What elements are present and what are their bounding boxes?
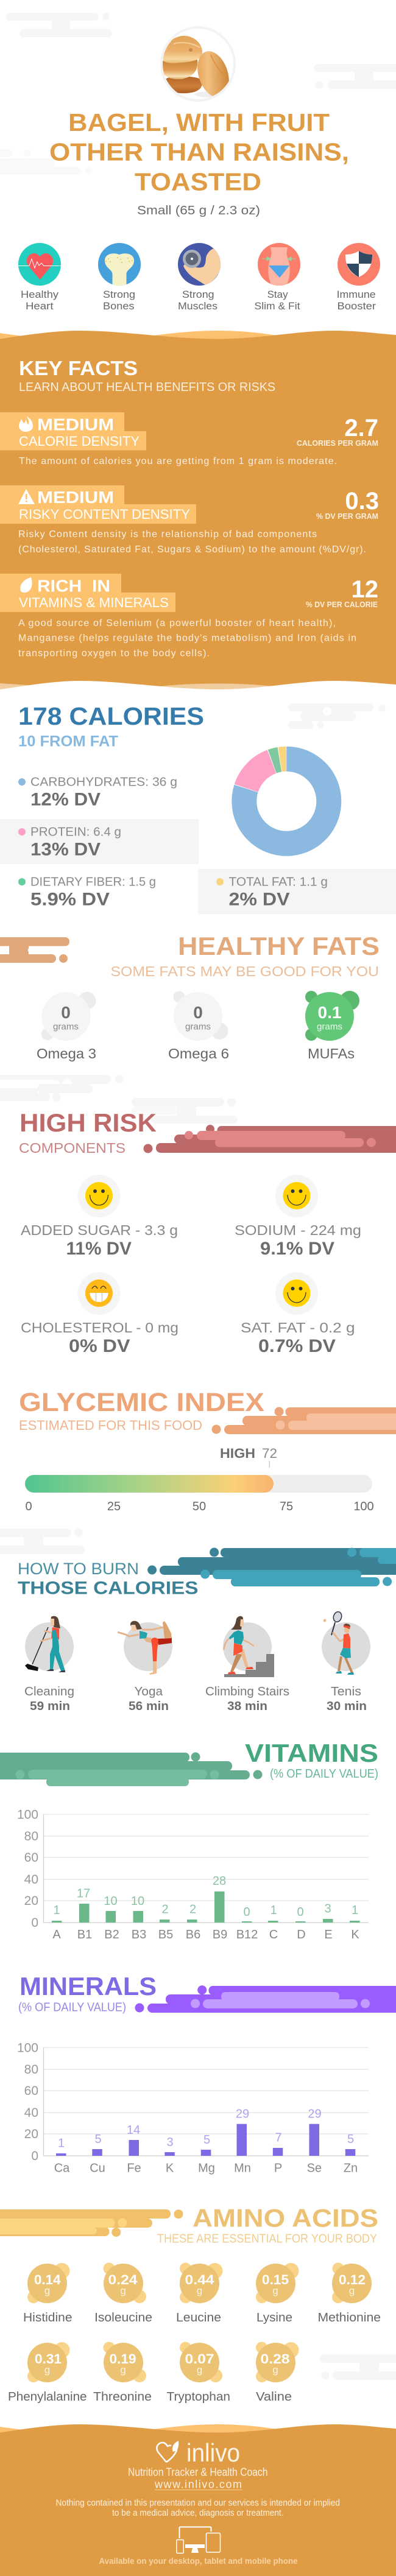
heading [18, 702, 204, 750]
icon: healthy heart: Healthy [21, 289, 59, 300]
heading: 10 FROM FAT [18, 733, 118, 750]
phenylalanine [8, 2342, 87, 2404]
fact: calorie density: 2.7 [344, 415, 378, 442]
bar chart: minerals: Se [307, 2162, 322, 2175]
activity: tennis: Tenis [331, 1685, 361, 1698]
lysine [256, 2263, 299, 2324]
legend: protein: PROTEIN: 6.4 g [30, 826, 121, 839]
background cloud near calories [288, 703, 385, 729]
bar chart: vitamins: 20 [24, 1894, 38, 1908]
disclaimer [56, 2498, 340, 2518]
logo: inlivo [186, 2438, 240, 2467]
icon: stay slim and fit [255, 243, 300, 312]
heading: HIGH RISK [19, 1108, 157, 1137]
leucine [176, 2263, 223, 2324]
threonine: g [120, 2364, 126, 2376]
fact: rich in vitamins and minerals: Manganese (helps regulate the body's metabolism) and Iron (aids in [18, 633, 356, 643]
icon: healthy heart [18, 243, 61, 312]
item: cholesterol: CHOLESTEROL - 0 mg [21, 1320, 179, 1336]
valine: Valine [256, 2390, 292, 2404]
item: cholesterol [21, 1272, 179, 1356]
bar chart: vitamins: 1 [352, 1904, 358, 1917]
fact: rich in vitamins and minerals: % DV PER CALORIE [306, 600, 378, 609]
bar chart: vitamins: 1 [53, 1904, 60, 1917]
header decoration [135, 1985, 396, 2013]
isoleucine [94, 2263, 152, 2324]
bar chart: vitamins: 0 [31, 1916, 38, 1930]
leucine: Leucine [176, 2311, 221, 2324]
heading: GLYCEMIC INDEX [19, 1388, 264, 1417]
legend: dietary fiber [18, 876, 156, 910]
bar chart: minerals [17, 2041, 369, 2175]
panel: amino acids: THESE ARE ESSENTIAL FOR YOUR BODY [157, 2233, 377, 2246]
bar chart: vitamins [17, 1807, 369, 1941]
icon: stay slim and fit: Stay [267, 289, 288, 300]
omega 3 [37, 991, 96, 1061]
panel: key facts [0, 331, 396, 694]
icon: strong muscles: Muscles [178, 300, 217, 312]
activity: climbing stairs: Climbing Stairs [205, 1685, 289, 1698]
panel: footer [0, 2424, 396, 2576]
title: OTHER THAN RAISINS, [49, 138, 349, 166]
bar chart: minerals: Zn [344, 2162, 358, 2175]
omega 6: 0 [193, 1003, 203, 1022]
image: bagels in a circle [161, 27, 235, 102]
heading: 178 CALORIES [18, 702, 204, 730]
legend: dietary fiber: DIETARY FIBER: 1.5 g [30, 876, 156, 889]
bar chart: minerals: 5 [94, 2133, 102, 2146]
gauge value: 72 [262, 1446, 277, 1461]
isoleucine: 0.24 [108, 2272, 138, 2287]
heading [19, 357, 275, 394]
fact: rich in vitamins and minerals: A good source of Selenium (a powerful booster of heart health), [18, 618, 336, 628]
header decoration [0, 1753, 262, 1786]
item: saturated fat: 0.7% DV [258, 1336, 336, 1356]
bar chart: minerals: Mg [198, 2162, 215, 2175]
activity: tennis: 30 min [327, 1700, 367, 1713]
icon: strong bones: Strong [103, 289, 135, 300]
header decoration [212, 1407, 396, 1434]
panel: healthy fats [0, 932, 380, 1061]
bar chart: vitamins: B1 [77, 1928, 92, 1941]
lysine: g [272, 2285, 278, 2296]
bar chart: vitamins: 10 [104, 1895, 118, 1908]
item: sodium [235, 1175, 361, 1259]
gauge ticks: 100 [353, 1500, 374, 1513]
phenylalanine: 0.31 [35, 2351, 62, 2367]
omega 6: Omega 6 [168, 1046, 229, 1061]
item: saturated fat [241, 1272, 355, 1356]
icon: immune booster: Immune [337, 289, 376, 300]
legend: protein: 13% DV [30, 839, 101, 860]
tagline: Nutrition Tracker & Health Coach [128, 2466, 268, 2479]
bar chart: minerals: 14 [127, 2124, 140, 2137]
bar chart: vitamins: D [297, 1928, 306, 1941]
threonine: 0.19 [110, 2351, 136, 2367]
methionine [318, 2263, 381, 2324]
bar chart: vitamins: B2 [104, 1928, 119, 1941]
panel: vitamins: (% OF DAILY VALUE) [270, 1767, 378, 1781]
heading: LEARN ABOUT HEALTH BENEFITS OR RISKS [19, 381, 275, 394]
legend: total fat: 2% DV [229, 889, 290, 910]
panel: how to burn those calories [18, 1548, 396, 1713]
bar chart: minerals: Ca [54, 2162, 70, 2175]
fact: risky content density: 0.3 [345, 488, 379, 515]
bar chart: minerals: 80 [24, 2063, 38, 2077]
bar chart: vitamins: C [269, 1928, 278, 1941]
heading: HOW TO BURN [18, 1560, 139, 1578]
bar chart: vitamins: B9 [213, 1928, 227, 1941]
gauge ticks: 50 [193, 1500, 206, 1513]
bar chart: minerals: Fe [127, 2162, 141, 2175]
disclaimer: Nothing contained in this presentation and our services is intended or implied [56, 2498, 340, 2508]
icon: strong muscles [178, 243, 221, 312]
lysine: 0.15 [262, 2272, 289, 2287]
bar chart: vitamins: E [324, 1928, 333, 1941]
panel: amino acids [0, 2203, 381, 2404]
histidine [23, 2263, 72, 2324]
activity: climbing stairs [205, 1616, 289, 1713]
heading: VITAMINS [245, 1739, 378, 1767]
bar chart: vitamins: 10 [131, 1895, 144, 1908]
background cloud before burn [0, 1529, 85, 1554]
heading: AMINO ACIDS [193, 2203, 378, 2233]
panel: high risk components: COMPONENTS [19, 1140, 126, 1156]
panel: high risk components [19, 1108, 396, 1356]
panel: glycemic index: ESTIMATED FOR THIS FOOD [19, 1418, 202, 1433]
bar chart: minerals: P [274, 2162, 282, 2175]
header decoration [0, 2209, 183, 2237]
fact: calorie density: MEDIUM [37, 415, 114, 434]
bar chart: vitamins: 17 [77, 1887, 90, 1900]
gauge value: HIGH [220, 1446, 255, 1461]
fact: calorie density: CALORIES PER GRAM [297, 439, 378, 448]
bar chart: vitamins: 0 [243, 1906, 250, 1919]
icon: strong bones [98, 243, 141, 312]
leucine: 0.44 [185, 2272, 214, 2287]
gauge bar [25, 1475, 372, 1493]
panel: vitamins [0, 1739, 378, 1941]
title: TOASTED [135, 168, 261, 196]
fact: rich in vitamins and minerals: VITAMINS & MINERALS [19, 595, 169, 610]
background clouds top [0, 13, 396, 175]
item: added sugar: ADDED SUGAR - 3.3 g [21, 1222, 178, 1238]
bar chart: minerals: 1 [58, 2136, 65, 2150]
activity: cleaning: Cleaning [24, 1685, 74, 1698]
mufas: 0.1 [318, 1003, 341, 1022]
bar chart: vitamins: A [52, 1928, 61, 1941]
mufas [305, 991, 359, 1061]
fact: risky content density: RISKY CONTENT DENSITY [19, 507, 190, 522]
bar chart: minerals: 40 [24, 2106, 38, 2120]
item: added sugar [21, 1175, 178, 1259]
omega 6 [168, 991, 229, 1061]
valine: 0.28 [261, 2351, 290, 2367]
bar chart: minerals: 5 [347, 2133, 354, 2146]
legend: total fat: TOTAL FAT: 1.1 g [229, 876, 328, 889]
fact: risky content density [0, 485, 379, 555]
fact: calorie density: CALORIE DENSITY [19, 434, 140, 449]
mufas: MUFAs [308, 1046, 355, 1061]
gauge value [220, 1446, 277, 1468]
phenylalanine: Phenylalanine [8, 2390, 87, 2404]
panel: healthy fats: SOME FATS MAY BE GOOD FOR YOU [111, 963, 379, 979]
threonine [93, 2342, 152, 2404]
lysine: Lysine [256, 2311, 292, 2324]
fact: rich in vitamins and minerals: 12 [351, 576, 378, 603]
tryptophan [167, 2342, 230, 2404]
activity: climbing stairs: 38 min [227, 1700, 267, 1713]
activity: yoga: 56 min [129, 1700, 169, 1713]
background cloud near amino acids [319, 2354, 396, 2380]
header decoration [144, 1125, 396, 1153]
bar chart: vitamins: K [351, 1928, 359, 1941]
omega 3: 0 [61, 1003, 71, 1022]
title: BAGEL, WITH FRUIT [68, 108, 330, 136]
fact: risky content density: MEDIUM [37, 488, 114, 507]
valine [256, 2342, 299, 2404]
mufas: grams [317, 1022, 342, 1032]
disclaimer: to be a medical advice, diagnosis or treatment. [112, 2508, 284, 2518]
bar chart: vitamins: 40 [24, 1873, 38, 1887]
bar chart: vitamins: B5 [158, 1928, 173, 1941]
threonine: Threonine [93, 2390, 152, 2404]
legend: carbohydrates: CARBOHYDRATES: 36 g [30, 776, 177, 789]
item: cholesterol: 0% DV [69, 1336, 130, 1356]
bar chart: vitamins: B3 [132, 1928, 146, 1941]
isoleucine: Isoleucine [94, 2311, 152, 2324]
tryptophan: 0.07 [185, 2351, 214, 2367]
heading: MINERALS [19, 1972, 157, 2001]
donut chart [244, 759, 329, 843]
legend: total fat [198, 869, 396, 914]
valine: g [272, 2364, 278, 2376]
legend: carbohydrates: 12% DV [30, 789, 101, 810]
histidine: Histidine [23, 2311, 72, 2324]
activity: yoga: Yoga [134, 1685, 163, 1698]
fact: risky content density: Risky Content density is the relationship of bad components [18, 529, 317, 540]
methionine: 0.12 [339, 2272, 366, 2287]
icon: stay slim and fit: Slim & Fit [255, 300, 300, 312]
item: sodium: 9.1% DV [260, 1239, 334, 1259]
omega 3: Omega 3 [37, 1046, 96, 1061]
bar chart: minerals: 3 [166, 2136, 174, 2149]
bar chart: minerals: 0 [31, 2149, 38, 2163]
legend: protein [0, 819, 199, 864]
phenylalanine: g [44, 2364, 50, 2376]
panel: minerals: (% OF DAILY VALUE) [18, 2001, 126, 2015]
methionine: g [349, 2285, 355, 2296]
fact: rich in vitamins and minerals [0, 574, 378, 659]
heading: HEALTHY FATS [178, 932, 380, 960]
bar chart: vitamins: 80 [24, 1829, 38, 1843]
fact: calorie density [0, 412, 378, 466]
item: sodium: SODIUM - 224 mg [235, 1222, 361, 1238]
bar chart: vitamins: 1 [270, 1904, 277, 1917]
item: saturated fat: SAT. FAT - 0.2 g [241, 1320, 355, 1336]
fact: rich in vitamins and minerals: transporting oxygen to the body cells). [18, 648, 210, 659]
logo [157, 2438, 240, 2467]
bar chart: vitamins: 2 [189, 1902, 196, 1916]
title [49, 108, 349, 196]
panel: calories [0, 702, 396, 914]
bar chart: minerals: 29 [308, 2107, 322, 2120]
serving size: Small (65 g / 2.3 oz) [137, 204, 260, 217]
bar chart: vitamins: 2 [161, 1902, 169, 1916]
icon: healthy heart: Heart [26, 300, 54, 312]
legend: dietary fiber: 5.9% DV [30, 889, 110, 910]
item: added sugar: 11% DV [66, 1239, 132, 1259]
panel: how to burn those calories: THOSE CALORIES [18, 1578, 199, 1598]
legend: carbohydrates [18, 776, 177, 810]
benefit icons row [18, 243, 380, 312]
panel: minerals [17, 1972, 396, 2175]
bar chart: minerals: 29 [236, 2107, 249, 2120]
panel: glycemic index [19, 1388, 396, 1513]
fact: risky content density: % DV PER GRAM [316, 512, 378, 521]
isoleucine: g [120, 2285, 126, 2296]
heading: KEY FACTS [19, 357, 138, 379]
availability note: Available on your desktop, tablet and mobile phone [99, 2556, 298, 2566]
bar chart: vitamins: 60 [24, 1851, 38, 1865]
bar chart: minerals: Mn [234, 2162, 251, 2175]
gauge ticks [25, 1500, 374, 1513]
website: www.inlivo.com [154, 2479, 242, 2491]
header decoration [0, 937, 69, 963]
omega 3: grams [53, 1022, 79, 1032]
icon: immune booster: Booster [338, 300, 376, 312]
bar chart: vitamins: B6 [186, 1928, 200, 1941]
icon: immune booster [337, 243, 380, 312]
header decoration [147, 1548, 396, 1586]
bar chart: minerals: K [166, 2162, 174, 2175]
bar chart: vitamins: 28 [213, 1874, 226, 1888]
histidine: 0.14 [34, 2272, 61, 2287]
bar chart: minerals: 7 [275, 2131, 282, 2145]
bar chart: minerals: 60 [24, 2084, 38, 2098]
gauge ticks: 75 [280, 1500, 293, 1513]
omega 6: grams [185, 1022, 211, 1032]
bar chart: vitamins: B12 [236, 1928, 258, 1941]
bar chart: vitamins: 0 [297, 1906, 304, 1919]
fact: risky content density: (Cholesterol, Saturated Fat, Sugars & Sodium) to the amount (%DV/gr). [18, 544, 366, 555]
background clouds before high risk [0, 1075, 238, 1124]
activity: tennis [322, 1611, 370, 1713]
icon: devices [177, 2527, 221, 2553]
gauge ticks: 0 [25, 1500, 32, 1513]
bar chart: vitamins: 3 [324, 1902, 331, 1916]
icon: strong bones: Bones [103, 300, 134, 312]
activity: cleaning: 59 min [30, 1700, 70, 1713]
leucine: g [197, 2285, 202, 2296]
tryptophan: Tryptophan [167, 2390, 230, 2404]
activity: cleaning [24, 1616, 74, 1713]
fact: calorie density: The amount of calories you are getting from 1 gram is moderate. [19, 456, 337, 466]
tryptophan: g [197, 2364, 202, 2376]
activity: yoga [118, 1621, 172, 1713]
bar chart: vitamins: 100 [17, 1807, 38, 1822]
gauge ticks: 25 [107, 1500, 121, 1513]
fact: rich in vitamins and minerals: RICH IN [37, 576, 110, 596]
icon: strong muscles: Strong [182, 289, 214, 300]
methionine: Methionine [318, 2311, 381, 2324]
bar chart: minerals: 20 [24, 2127, 38, 2141]
bar chart: minerals: 100 [17, 2041, 38, 2055]
bar chart: minerals: 5 [203, 2133, 210, 2147]
bar chart: minerals: Cu [90, 2162, 105, 2175]
histidine: g [44, 2285, 50, 2296]
